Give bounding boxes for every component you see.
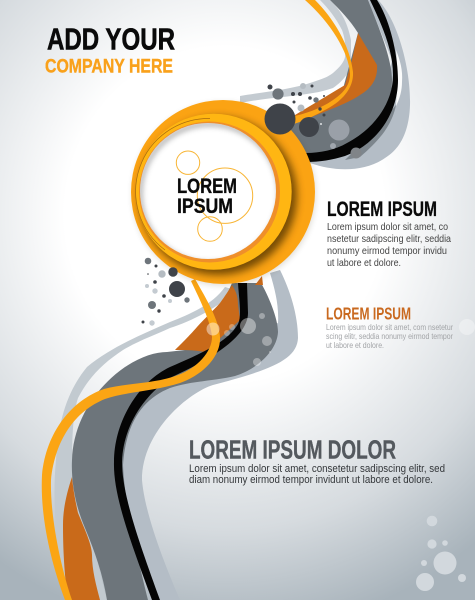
translucent dots on lower ribbon: [206, 313, 272, 366]
title: COMPANY HERE: [45, 55, 173, 77]
ribbon: yellow lower: [42, 279, 220, 600]
white centre inner shadow: [140, 124, 280, 264]
dots cluster left: [142, 258, 190, 326]
dots cluster top: [264, 83, 362, 158]
text block: lorem ipsum dolor: Lorem ipsum dolor sit amet, consetetur sadipscing elitr, sed: [189, 463, 445, 475]
ribbon: thin light lower: [54, 287, 235, 600]
dark arc: [136, 118, 210, 250]
ribbon: black lower: [114, 283, 248, 600]
ribbon: orange peek: [255, 276, 263, 285]
text block: lorem ipsum dolor: diam nonumy eirmod tempor invidunt ut labore et dolore.: [189, 474, 433, 486]
bubbles bottom right: [416, 516, 466, 591]
title: ADD YOUR: [47, 22, 175, 56]
emblem circle: [131, 100, 316, 286]
text block: lorem ipsum black: LOREM IPSUM: [327, 198, 437, 221]
emblem text: IPSUM: [177, 195, 233, 218]
ribbon: pale outer upper: [300, 0, 410, 169]
ribbon: orange lower middle: [175, 285, 240, 352]
text block: lorem ipsum orange: [326, 304, 453, 350]
ribbon: gray upper band: [285, 0, 392, 158]
emblem text: LOREM: [177, 175, 237, 198]
inner disc shadow: [139, 117, 297, 275]
ribbon: pale outer lower: [114, 270, 298, 600]
ribbon: yellow upper: [290, 0, 353, 125]
text block: lorem ipsum black: Lorem ipsum dolor sit amet, co: [327, 221, 448, 233]
text block: lorem ipsum black: ut labore et dolore.: [327, 257, 401, 269]
text block: lorem ipsum orange: ut labore et dolore.: [326, 340, 384, 350]
outer orange disc: [131, 100, 315, 284]
faint edge bubble: [459, 319, 475, 335]
text block: lorem ipsum dolor: [189, 434, 445, 486]
ribbon group: upper right waves: [240, 0, 410, 169]
ribbon: white sliver: [396, 50, 402, 106]
emblem shadow: [132, 102, 316, 286]
ribbon: orange upper: [290, 33, 377, 122]
ribbon: orange lower left: [63, 477, 100, 600]
outline circles: [176, 151, 253, 241]
text block: lorem ipsum black: nsetetur sadipscing elitr, seddia: [327, 233, 451, 245]
ribbon: gray sliver outside black: [345, 105, 396, 160]
text block: lorem ipsum black: [327, 198, 451, 269]
ribbon: thin light upper: [240, 0, 351, 103]
text block: lorem ipsum dolor: LOREM IPSUM DOLOR: [189, 434, 396, 464]
title: [45, 22, 175, 77]
inner yellow disc: [136, 114, 292, 270]
orange ring: [139, 122, 280, 262]
ribbon: black upper: [306, 0, 398, 162]
white centre: [140, 123, 276, 259]
ribbon: gray lower band: [72, 283, 278, 600]
text block: lorem ipsum black: nonumy eirmod tempor invidu: [327, 245, 447, 257]
emblem text: [177, 175, 237, 218]
ribbon group: lower waves: [42, 270, 298, 600]
text block: lorem ipsum orange: LOREM IPSUM: [326, 304, 411, 324]
